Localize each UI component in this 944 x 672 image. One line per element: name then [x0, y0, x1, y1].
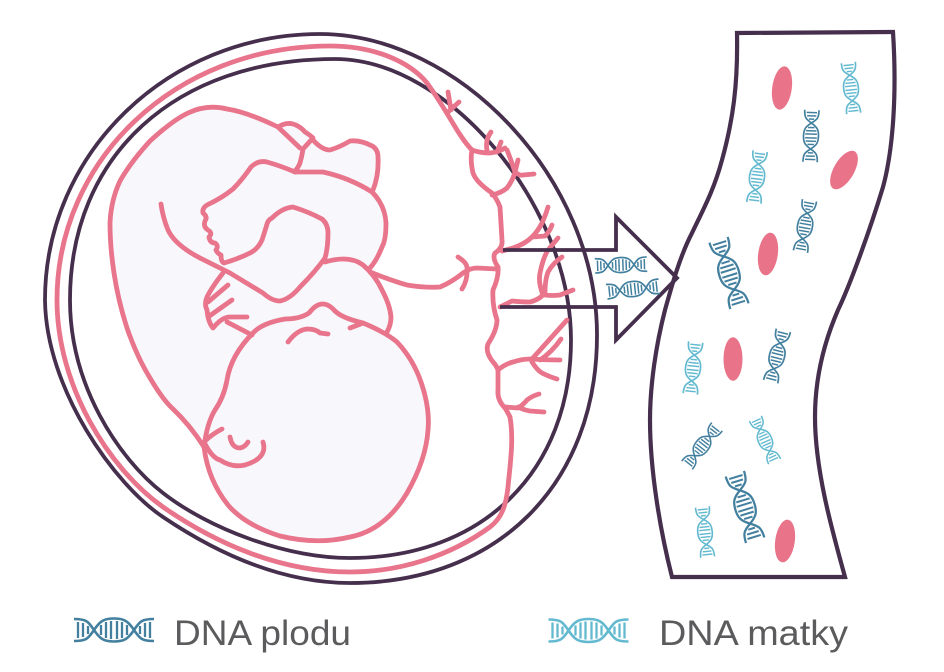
- inner uterine wall: [70, 59, 571, 558]
- vessel trunk: [471, 150, 510, 417]
- top branches: [448, 92, 534, 195]
- legend: maternal DNA: [548, 614, 849, 653]
- placenta vessel branches: [370, 92, 573, 417]
- fetus outline: [110, 107, 428, 541]
- panel: maternal blood vessel: [650, 32, 895, 577]
- fetus silhouette fill: [110, 107, 428, 541]
- fetus head: [204, 304, 428, 541]
- fetus eyebrow: [288, 323, 363, 342]
- DNA fragments in arrow: [595, 257, 660, 299]
- panel: uterus with fetus: [45, 34, 597, 583]
- icon: fetal DNA: [74, 618, 154, 642]
- fetus back: [110, 107, 278, 447]
- fetal DNA in blood: [681, 110, 819, 543]
- middle branches: [500, 207, 573, 307]
- icon: maternal DNA: [548, 619, 628, 642]
- fetus hand toes: [206, 273, 252, 335]
- fetus arm and hand: [161, 162, 328, 301]
- lower branches: [498, 320, 567, 412]
- outer uterine wall: [45, 34, 597, 583]
- fetus ear: [204, 429, 264, 466]
- umbilical line and placenta vessel: [57, 46, 512, 572]
- maternal DNA in blood: [683, 62, 861, 558]
- label: DNA matky: DNA matky: [659, 614, 849, 653]
- arrow: transfer from placenta to maternal blood: [500, 217, 677, 340]
- fetus foot: [278, 123, 378, 190]
- fetus belly: [325, 259, 391, 332]
- red blood cells: [724, 65, 864, 564]
- fetal cord: [370, 257, 497, 289]
- label: DNA plodu: DNA plodu: [174, 614, 351, 653]
- legend: fetal DNA: [74, 614, 351, 653]
- fetus shoulder and torso: [295, 172, 386, 268]
